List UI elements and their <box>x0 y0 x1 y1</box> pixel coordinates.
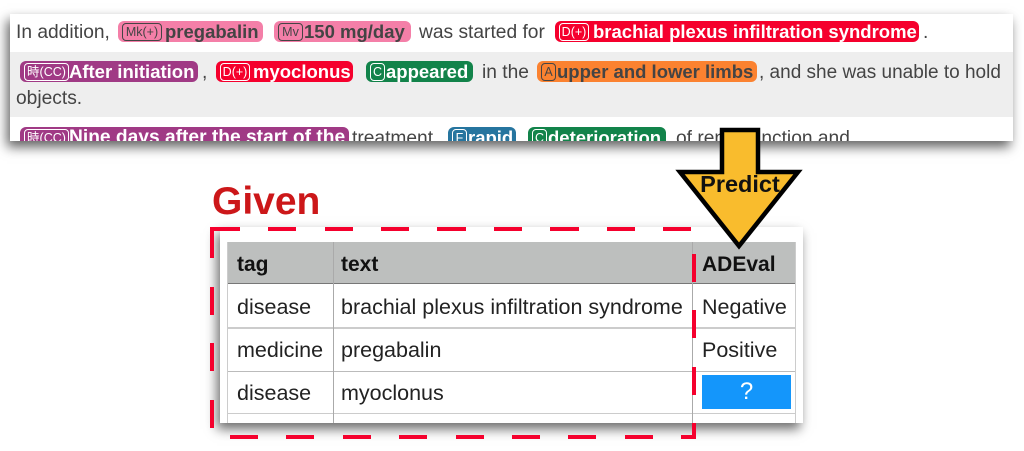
text: and she was unable to hold objects <box>16 62 1001 109</box>
cell: disease: disease <box>237 381 311 405</box>
text: period: . <box>923 22 928 43</box>
panel: annotated clinical text <box>10 14 1013 141</box>
tag: myoclonus: D(+) <box>223 65 247 79</box>
tag: 150 mg/day: Mv <box>282 25 299 39</box>
header: ADEval: ADEval <box>702 253 776 276</box>
table header row <box>227 242 795 284</box>
tag: upper and lower limbs: A <box>544 65 553 79</box>
cell: question mark prediction <box>702 375 791 409</box>
tag: pregabalin: pregabalin <box>165 21 259 42</box>
cell: brachial plexus infiltration syndrome: brachial plexus infiltration syndrome <box>341 295 683 319</box>
tag: After initiation: 時(CC) <box>27 65 66 79</box>
tag: brachial plexus infiltration syndrome: D(+) <box>562 25 586 39</box>
arrow label: Predict <box>700 171 780 197</box>
cell: medicine: medicine <box>237 338 323 362</box>
text: in the: in the <box>482 62 529 83</box>
cell: question mark prediction: ? <box>740 378 753 405</box>
tag: brachial plexus infiltration syndrome: brachial plexus infiltration syndrome <box>593 21 917 42</box>
cell: Positive: Positive <box>702 338 777 362</box>
tag: appeared: appeared <box>386 61 468 82</box>
tag: pregabalin <box>118 21 263 42</box>
row 2 background <box>10 52 1013 117</box>
cell: Negative: Negative <box>702 295 787 319</box>
header: tag: tag <box>237 253 268 276</box>
text: was started for: was started for <box>419 22 545 43</box>
tag: Nine days after the start of the <box>20 127 349 148</box>
tag: upper and lower limbs: upper and lower limbs <box>557 61 753 82</box>
text: In addition: In addition, <box>16 22 110 43</box>
cell: pregabalin: pregabalin <box>341 338 441 362</box>
tag: deterioration <box>528 127 666 148</box>
cell: myoclonus: myoclonus <box>341 381 444 405</box>
tag: pregabalin: Mk(+) <box>126 25 158 39</box>
arrow shape <box>680 130 798 246</box>
tag: appeared: C <box>373 65 382 79</box>
header: text: text <box>341 253 378 276</box>
panel: entity table <box>220 227 803 423</box>
tag: myoclonus: myoclonus <box>253 61 351 82</box>
tag: After initiation: After initiation <box>69 61 194 82</box>
tag: rapid <box>448 127 516 148</box>
row lines <box>227 327 795 329</box>
heading: Given: Given <box>212 180 320 223</box>
text: and she was unable to hold objects: objects. <box>16 88 82 109</box>
tag: 150 mg/day: 150 mg/day <box>304 21 405 42</box>
cell: disease: disease <box>237 295 311 319</box>
text: comma: , <box>202 62 207 83</box>
text: and she was unable to hold objects: , and she was unable to hold <box>759 62 1001 83</box>
